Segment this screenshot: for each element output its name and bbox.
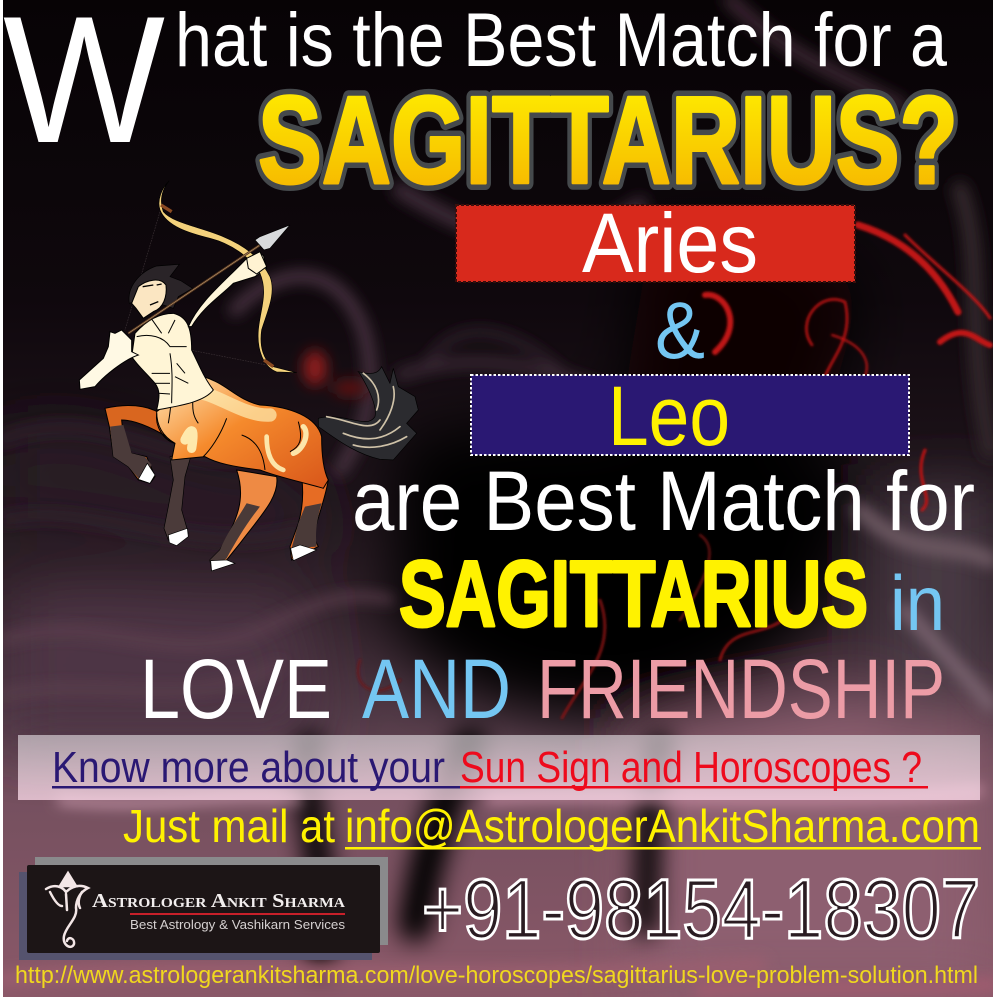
far rear leg: [210, 470, 277, 570]
gripping hand: [247, 252, 267, 274]
label: Aries: Aries: [582, 196, 758, 290]
soft red glow behind the archer: [303, 350, 368, 396]
icon: Ganesha: [46, 873, 88, 947]
label: Leo: Leo: [608, 369, 730, 463]
banner: know more: Sun Sign and Horoscopes ?: [460, 743, 922, 792]
text: SAGITTARIUS in: in: [890, 559, 945, 647]
face: [132, 280, 166, 318]
banner: know more: [18, 735, 980, 800]
text: LOVE AND FRIENDSHIP: LOVE: [140, 642, 332, 736]
illustration: centaur archer: [79, 181, 418, 571]
human torso: [132, 313, 213, 410]
left arm: [79, 330, 138, 389]
bow: [159, 181, 297, 373]
tail: [318, 367, 418, 460]
bow strings: [125, 209, 267, 365]
text: LOVE AND FRIENDSHIP: AND: [362, 642, 511, 736]
horse body: [157, 377, 328, 488]
panel: Aries: [456, 196, 855, 290]
footer: website url: http://www.astrologerankitsharma.com/love-horoscopes/sagittarius-love-problem-solution.html: [15, 962, 978, 989]
title: What is the Best Match for a: [3, 0, 948, 181]
logo: Astrologer Ankit Sharma: Astrologer Ankit Sharma: [92, 890, 346, 912]
logo: Astrologer Ankit Sharma: Best Astrology & Vashikarn Services: [130, 917, 346, 932]
text: LOVE AND FRIENDSHIP: [140, 642, 945, 736]
right arm: [188, 255, 267, 327]
arrow: [128, 245, 260, 333]
contact: email: Just mail at: [123, 800, 335, 852]
raised front leg: [105, 405, 175, 483]
standing front leg: [164, 453, 192, 545]
hair: [129, 264, 193, 308]
banner: know more: Know more about your: [52, 743, 445, 792]
near rear leg: [290, 477, 328, 560]
ampersand: &: [655, 286, 705, 376]
panel: Leo: [471, 369, 909, 463]
logo: Astrologer Ankit Sharma: [19, 857, 388, 960]
